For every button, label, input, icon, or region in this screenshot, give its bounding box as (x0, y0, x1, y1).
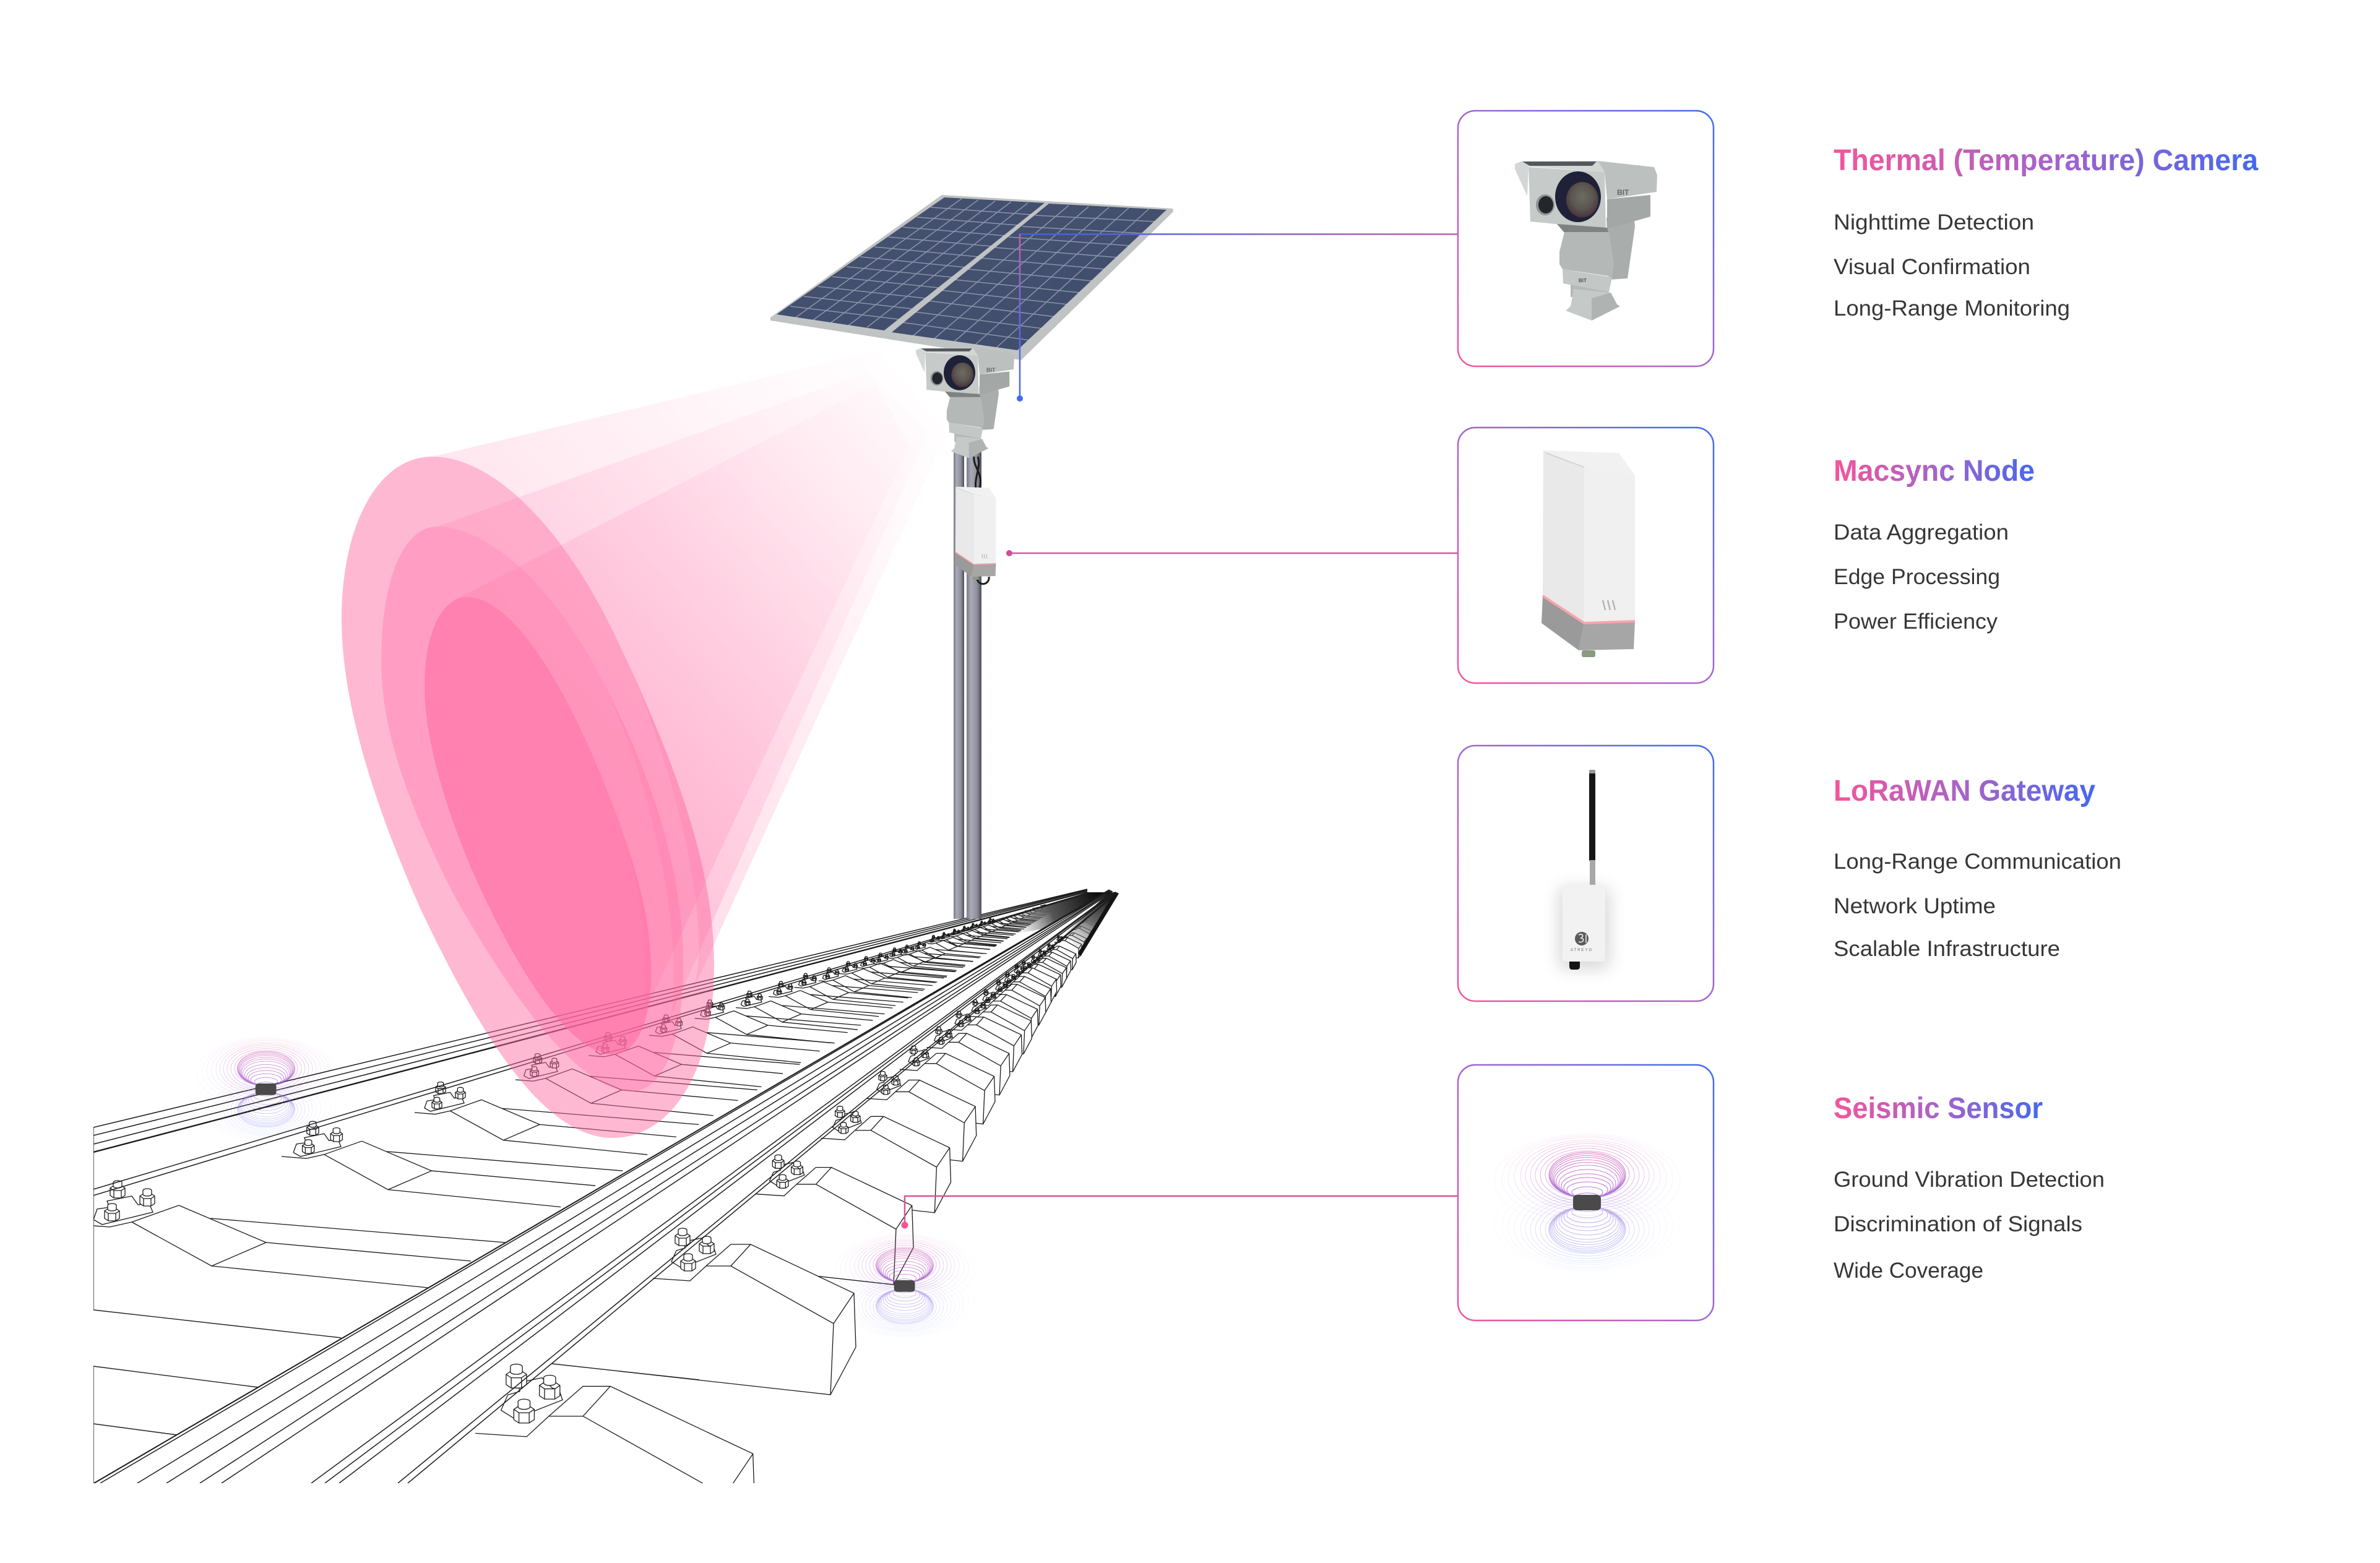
near sleeper ends (428, 901, 1110, 1563)
features (1834, 1168, 2105, 1283)
panel: seismic sensor (1458, 1065, 2105, 1320)
panel: LoRaWAN gateway (1458, 746, 2121, 1001)
right module (892, 204, 1166, 350)
middle beam (438, 372, 928, 1015)
features: Wide Coverage (1834, 1259, 1983, 1283)
card frame (1458, 111, 1714, 366)
card frame (1458, 428, 1714, 683)
seismic sensor on near side (835, 1234, 974, 1337)
solar panel (770, 195, 1173, 360)
near rail (94, 890, 1117, 1483)
outer beam (433, 350, 947, 990)
features: Scalable Infrastructure (1834, 937, 2060, 961)
features: Data Aggregation (1834, 520, 2009, 545)
panel: Macsync node (1458, 428, 2035, 683)
heading: Thermal (Temperature) Camera (1834, 144, 2258, 177)
features: Discrimination of Signals (1834, 1212, 2082, 1236)
camera base logo: BIT (1579, 278, 1587, 283)
heading: LoRaWAN Gateway (1834, 775, 2095, 807)
features: Nighttime Detection (1834, 210, 2034, 235)
features: Visual Confirmation (1834, 255, 2030, 279)
features (1834, 210, 2070, 321)
leader line: seismic sensor (901, 1196, 1457, 1229)
icon: seismic sensor waves (1494, 1134, 1680, 1271)
left edge of the drawing (93, 1127, 699, 1483)
features: Edge Processing (1834, 565, 2000, 589)
pole mounted Macsync node (955, 487, 996, 580)
card frame (1458, 1065, 1714, 1320)
panel: thermal camera (1458, 111, 2258, 366)
railway track line drawing (79, 889, 1119, 1563)
far fasteners (93, 918, 994, 1225)
features: Long-Range Communication (1834, 850, 2121, 874)
leader line: camera (1017, 234, 1457, 402)
panel frame (770, 195, 1173, 360)
far end dark taper (1009, 892, 1119, 957)
cell grid (790, 199, 1154, 348)
icon: thermal camera (1515, 161, 1657, 321)
features: Power Efficiency (1834, 609, 1998, 634)
pole mounted camera logo: BIT (986, 367, 996, 373)
features: Long-Range Monitoring (1834, 296, 2070, 321)
features: Network Uptime (1834, 894, 1996, 918)
leader line: node (1006, 550, 1457, 556)
features (1834, 520, 2009, 634)
icon: gateway with antenna (1559, 770, 1609, 970)
camera logo: BIT (1617, 188, 1629, 197)
card frame (1458, 746, 1714, 1001)
left module (777, 197, 1045, 330)
near fasteners (501, 936, 1063, 1423)
icon: gateway with antenna: ATREYO (1571, 949, 1593, 952)
inner ellipse (425, 597, 651, 1054)
heading: Macsync Node (1834, 455, 2035, 488)
seismic sensor on far side (197, 1038, 335, 1140)
far rail (93, 889, 1087, 1195)
thermal camera cone of view (342, 350, 947, 1138)
features (1834, 850, 2121, 961)
middle ellipse (381, 527, 683, 1092)
far sleepers (79, 905, 1061, 1288)
heading: Seismic Sensor (1834, 1092, 2043, 1125)
pole (954, 449, 989, 919)
inner beam (456, 384, 910, 1015)
features: Ground Vibration Detection (1834, 1168, 2105, 1192)
pole mounted thermal camera (916, 348, 1014, 458)
outer ellipse (342, 457, 714, 1138)
icon: node enclosure (1541, 450, 1635, 657)
